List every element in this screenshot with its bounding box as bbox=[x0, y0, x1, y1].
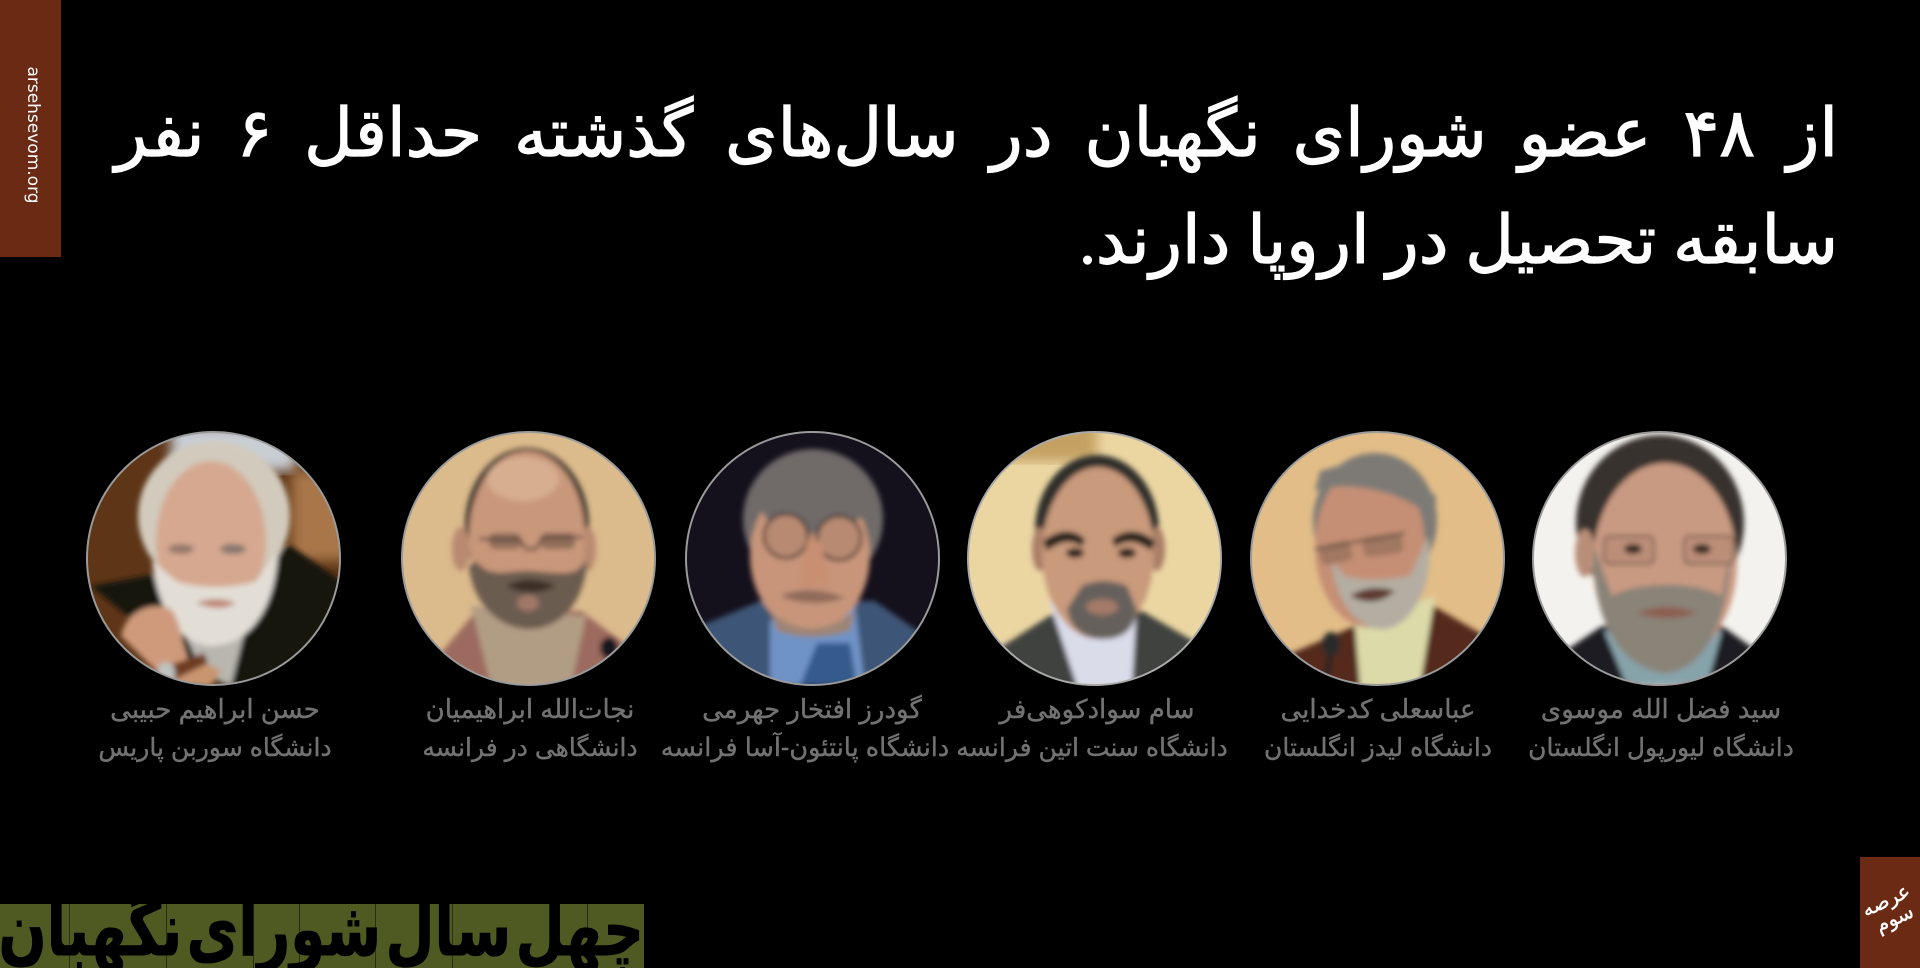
corner logo bbox=[1860, 857, 1920, 968]
label: Sam Savadkouhifar bbox=[956, 694, 1228, 762]
label: Seyed Fazlollah Mousavi: سید فضل الله موسوی bbox=[1541, 694, 1781, 724]
label: Abbasali Kadkhodaei: دانشگاه لیدز انگلستان bbox=[1264, 734, 1492, 762]
label: Abbasali Kadkhodaei: عباسعلی کدخدایی bbox=[1280, 694, 1476, 724]
label: Hassan Ebrahim Habibi: دانشگاه سوربن پاریس bbox=[98, 734, 332, 762]
label: Sam Savadkouhifar: دانشگاه سنت اتین فرانسه bbox=[956, 734, 1228, 762]
portrait: Abbasali Kadkhodaei bbox=[1250, 431, 1505, 686]
title line 1: از ۴۸ عضو شورای نگهبان در سال‌های گذشته حداقل ۶ نفر bbox=[115, 97, 1838, 171]
label: Nejatollah Ebrahimian bbox=[422, 694, 638, 762]
portrait: Nejatollah Ebrahimian bbox=[401, 431, 656, 686]
label: Goudarz Eftekhar Jahromi bbox=[661, 694, 949, 763]
side tab: website: arsehsevom.org bbox=[23, 66, 43, 204]
title line 2: سابقه تحصیل در اروپا دارند. bbox=[1079, 204, 1838, 278]
corner logo: سوم bbox=[1871, 899, 1917, 937]
label: Sam Savadkouhifar: سام سوادکوهی‌فر bbox=[999, 694, 1194, 724]
label: Hassan Ebrahim Habibi bbox=[98, 694, 332, 762]
label: Goudarz Eftekhar Jahromi: دانشگاه پانتئون-آسا فرانسه bbox=[661, 734, 949, 762]
label: Seyed Fazlollah Mousavi: دانشگاه لیورپول انگلستان bbox=[1528, 734, 1794, 762]
portrait: Seyed Fazlollah Mousavi bbox=[1532, 431, 1787, 686]
label: Hassan Ebrahim Habibi: حسن ابراهیم حبیبی bbox=[110, 694, 320, 724]
label: Nejatollah Ebrahimian: دانشگاهی در فرانسه bbox=[422, 734, 638, 762]
label: Goudarz Eftekhar Jahromi: گودرز افتخار جهرمی bbox=[702, 694, 922, 724]
label: Nejatollah Ebrahimian: نجات‌الله ابراهیمیان bbox=[426, 694, 634, 724]
portrait: Goudarz Eftekhar Jahromi bbox=[685, 431, 940, 686]
label: Abbasali Kadkhodaei bbox=[1264, 694, 1492, 762]
portrait: Hassan Ebrahim Habibi bbox=[86, 431, 341, 686]
side tab: website bbox=[0, 0, 61, 257]
label: Seyed Fazlollah Mousavi bbox=[1528, 694, 1794, 762]
portrait: Sam Savadkouhifar bbox=[967, 431, 1222, 686]
